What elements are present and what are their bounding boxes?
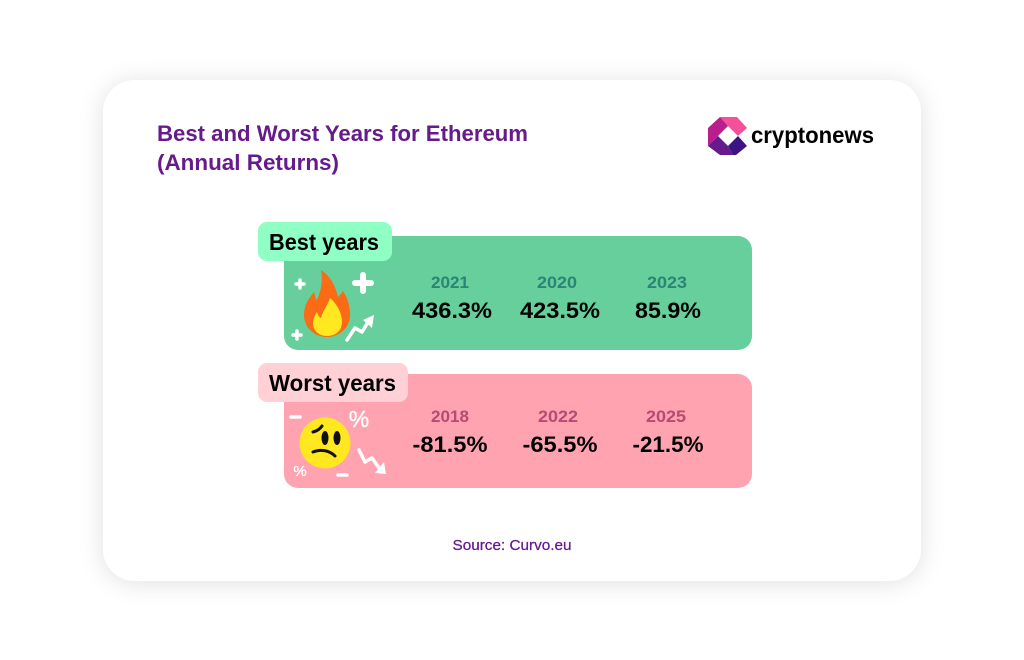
2022 column [522, 407, 598, 457]
2020 column: 423.5% [520, 298, 600, 323]
pink panel background [284, 374, 752, 488]
title: (Annual Returns) [157, 150, 339, 175]
2023 column: 85.9% [635, 298, 701, 323]
2022 column: 2022 [538, 407, 578, 426]
best years values [412, 273, 701, 323]
icon: worried face [300, 418, 350, 468]
icon: flame [304, 270, 350, 337]
2021 column: 436.3% [412, 298, 492, 323]
worst years values [412, 407, 704, 457]
2018 column [412, 407, 488, 457]
best years label [258, 222, 392, 261]
2025 column: 2025 [646, 407, 686, 426]
2018 column: -81.5% [412, 432, 488, 457]
title: Best and Worst Years for Ethereum [157, 121, 528, 146]
2025 column [632, 407, 704, 457]
2022 column: -65.5% [522, 432, 598, 457]
panel: best years [258, 222, 752, 350]
icon: minus and percent signs [291, 406, 369, 480]
icon: minus and percent signs: % [349, 406, 369, 432]
panel: worst years [258, 363, 752, 488]
2021 column: 2021 [431, 273, 469, 292]
logo wordmark: cryptonews [751, 122, 874, 148]
icon: minus and percent signs: % [293, 463, 307, 480]
2018 column: 2018 [431, 407, 469, 426]
logo: cryptonews [708, 117, 874, 155]
worst years label: Worst years [269, 370, 396, 396]
icon: falling arrow [359, 450, 386, 474]
source note: Source: Curvo.eu [452, 538, 572, 554]
icon: plus signs [293, 275, 371, 339]
2025 column: -21.5% [632, 432, 704, 457]
2021 column [412, 273, 492, 323]
best years label: Best years [269, 229, 379, 255]
2020 column [520, 273, 600, 323]
green panel background [284, 236, 752, 350]
title [157, 121, 528, 175]
2020 column: 2020 [537, 273, 577, 292]
worst years label [258, 363, 408, 402]
2023 column [635, 273, 701, 323]
2023 column: 2023 [647, 273, 687, 292]
card panel [103, 80, 921, 581]
icon: rising arrow [347, 315, 374, 340]
icon: logo mark [708, 117, 747, 155]
